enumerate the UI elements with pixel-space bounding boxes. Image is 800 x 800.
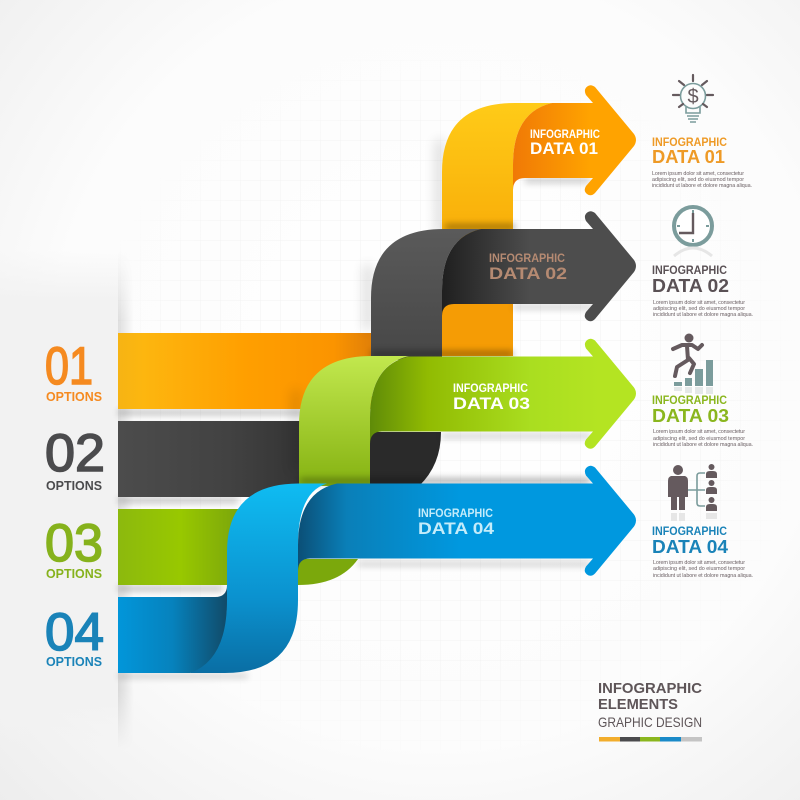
option 01: 01: [45, 337, 93, 396]
text block: data 01: [652, 135, 752, 189]
ribbon: green band and arrow: [118, 339, 636, 591]
title block: infographic elements: [598, 680, 702, 730]
option 04: 04: [45, 603, 104, 662]
text block: data 01: DATA 01: [652, 147, 725, 167]
option 01: OPTIONS: [46, 390, 102, 404]
text block: data 02: incididunt ut labore et dolore magna aliqua.: [653, 312, 753, 318]
title block: infographic elements: INFOGRAPHIC: [598, 680, 702, 697]
icon: light bulb with dollar sign: $: [687, 86, 699, 108]
panel: left option strip: [26, 270, 130, 733]
arrow label: data 04: [418, 508, 495, 538]
text block: data 04: INFOGRAPHIC: [652, 524, 727, 538]
text block: data 03: DATA 03: [652, 406, 729, 426]
title block: infographic elements: GRAPHIC DESIGN: [598, 714, 702, 730]
arrow label: data 02: [489, 253, 567, 283]
text block: data 02: [652, 263, 753, 318]
title block: infographic elements: ELEMENTS: [598, 696, 678, 713]
text block: data 01: Lorem ipsum dolor sit amet, consectetur: [652, 171, 744, 177]
text block: data 04: adipiscing elit, sed do eiusmod tempor: [653, 566, 745, 572]
text block: data 03: incididunt ut labore et dolore magna aliqua.: [653, 442, 753, 448]
text block: data 03: adipiscing elit, sed do eiusmod tempor: [653, 436, 745, 442]
text block: data 01: INFOGRAPHIC: [652, 135, 727, 149]
arrow label: data 03: [453, 383, 530, 413]
ribbon: grey band and arrow: [118, 211, 636, 503]
option 02: OPTIONS: [46, 479, 102, 493]
text block: data 02: Lorem ipsum dolor sit amet, consectetur: [653, 300, 745, 306]
arrow label: data 01: DATA 01: [530, 140, 598, 158]
arrow label: data 04: INFOGRAPHIC: [418, 508, 493, 520]
arrow label: data 04: DATA 04: [418, 519, 495, 538]
colour legend bar: [599, 737, 702, 742]
icon: light bulb with dollar sign: [673, 75, 713, 122]
text block: data 02: adipiscing elit, sed do eiusmod tempor: [653, 306, 745, 312]
ribbon: blue band and arrow: [118, 466, 636, 678]
text block: data 04: [652, 524, 753, 579]
text block: data 04: DATA 04: [652, 537, 728, 557]
text block: data 01: incididunt ut labore et dolore magna aliqua.: [652, 183, 752, 189]
icon: clock: [674, 207, 712, 256]
text block: data 03: INFOGRAPHIC: [652, 393, 727, 407]
ribbon: orange band and arrow: [118, 85, 636, 415]
arrow label: data 02: INFOGRAPHIC: [489, 253, 565, 265]
text block: data 02: INFOGRAPHIC: [652, 263, 727, 277]
text block: data 04: incididunt ut labore et dolore magna aliqua.: [653, 573, 753, 579]
arrow label: data 01: INFOGRAPHIC: [530, 129, 600, 141]
option 03: 03: [45, 514, 103, 573]
option 03: OPTIONS: [46, 567, 102, 581]
arrow label: data 03: DATA 03: [453, 394, 530, 413]
arrow label: data 03: INFOGRAPHIC: [453, 383, 528, 395]
text block: data 01: adipiscing elit, sed do eiusmod tempor: [652, 177, 744, 183]
icon: runner climbing bars: [673, 334, 713, 394]
option 04: OPTIONS: [46, 655, 102, 669]
icon: manager and team: [668, 464, 717, 521]
arrow label: data 01: [530, 129, 600, 158]
text block: data 03: [652, 393, 753, 448]
text block: data 03: Lorem ipsum dolor sit amet, consectetur: [653, 429, 745, 435]
arrow label: data 02: DATA 02: [489, 264, 567, 283]
option 02: 02: [45, 424, 105, 483]
text block: data 04: Lorem ipsum dolor sit amet, consectetur: [653, 560, 745, 566]
text block: data 02: DATA 02: [652, 276, 729, 296]
